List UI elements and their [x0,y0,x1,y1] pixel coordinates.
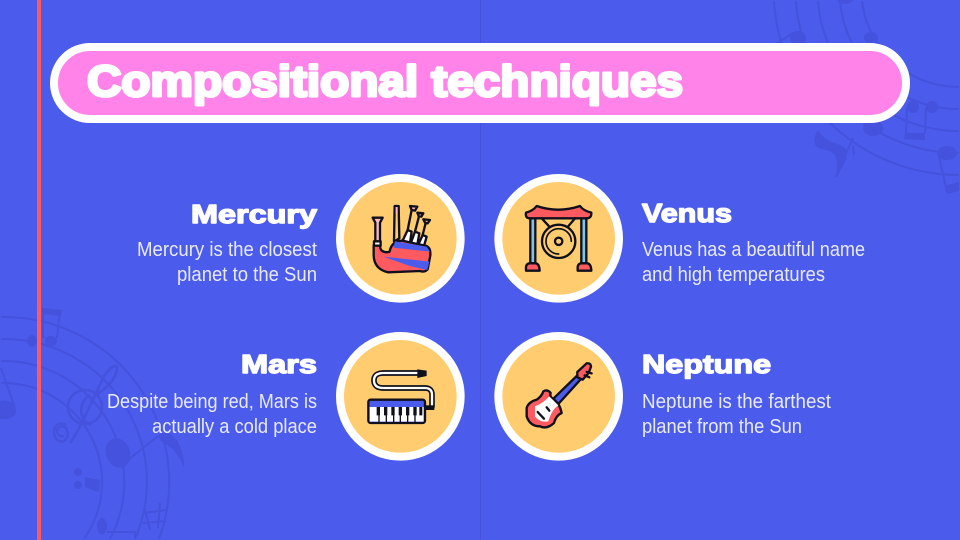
text block: Venus [642,198,865,286]
text block: Venus: and high temperatures [642,264,825,286]
icon: gong [498,178,619,299]
text block: Neptune: Neptune is the farthest [642,391,831,413]
text block: Mercury: Mercury [191,199,318,229]
text block: Mars: Mars [241,349,317,379]
text block: Neptune [642,349,831,438]
text block: Mercury: planet to the Sun [177,264,317,286]
title bar [54,47,906,119]
decoration: music staff upper right [774,0,959,194]
text block: Venus: Venus has a beautiful name [642,239,865,261]
text block: Mars: actually a cold place [152,416,317,438]
icon: melodica [340,336,461,457]
text block: Neptune: Neptune [642,349,771,379]
icon: bagpipes [340,178,461,299]
text block: Mars [107,349,317,438]
text block: Mercury [137,199,318,286]
text block: Mars: Despite being red, Mars is [107,391,317,413]
title: Compositional techniques [87,57,683,106]
icon: electric guitar [498,336,619,457]
decoration: music staff lower left [0,308,184,539]
text block: Mercury: Mercury is the closest [137,239,317,261]
text block: Venus: Venus [642,198,732,228]
text block: Neptune: planet from the Sun [642,416,802,438]
accent: vertical red line [37,0,41,540]
